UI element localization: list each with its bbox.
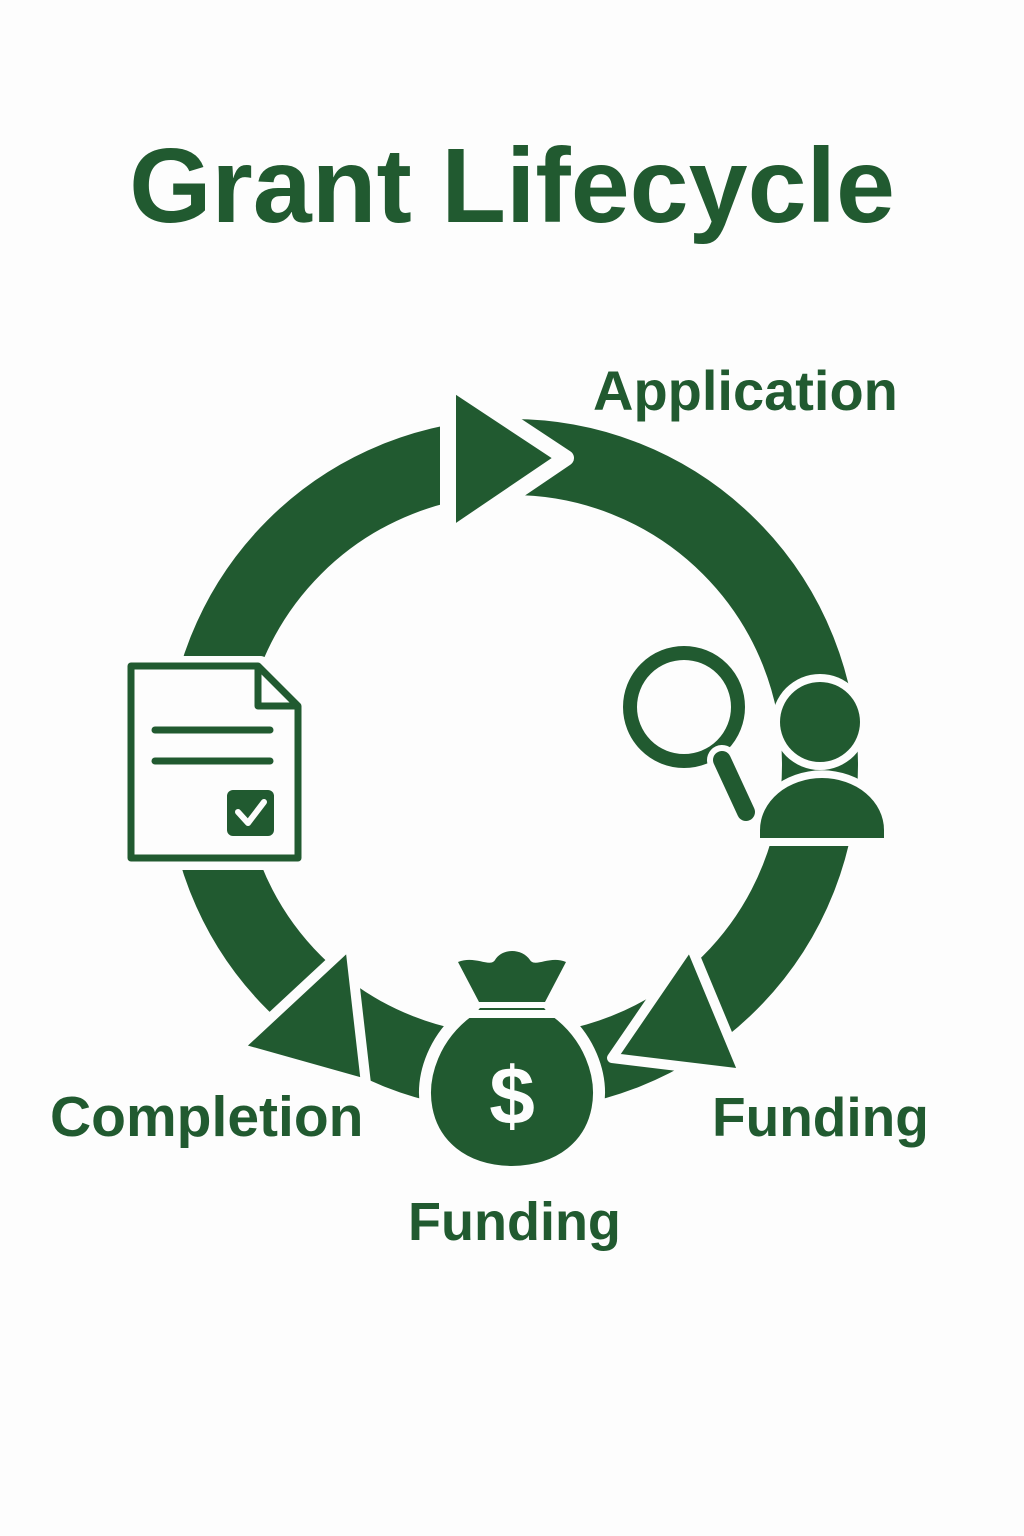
label: Completion: Completion xyxy=(50,1085,363,1149)
label: Application: Application xyxy=(593,359,898,422)
icon: money bag: $ xyxy=(489,1051,535,1142)
icon: money bag xyxy=(425,951,599,1172)
icon: document with checkbox xyxy=(128,666,300,860)
label: Funding right: Funding xyxy=(712,1086,929,1148)
title: Grant Lifecycle xyxy=(129,127,895,245)
icon: reviewer with magnifier xyxy=(618,641,892,846)
arrow: bottom-left xyxy=(238,944,366,1084)
arrow: top xyxy=(448,380,566,538)
cycle ring xyxy=(204,457,820,1073)
arrow: bottom-right xyxy=(612,944,744,1074)
label: Funding bottom: Funding xyxy=(408,1192,621,1252)
